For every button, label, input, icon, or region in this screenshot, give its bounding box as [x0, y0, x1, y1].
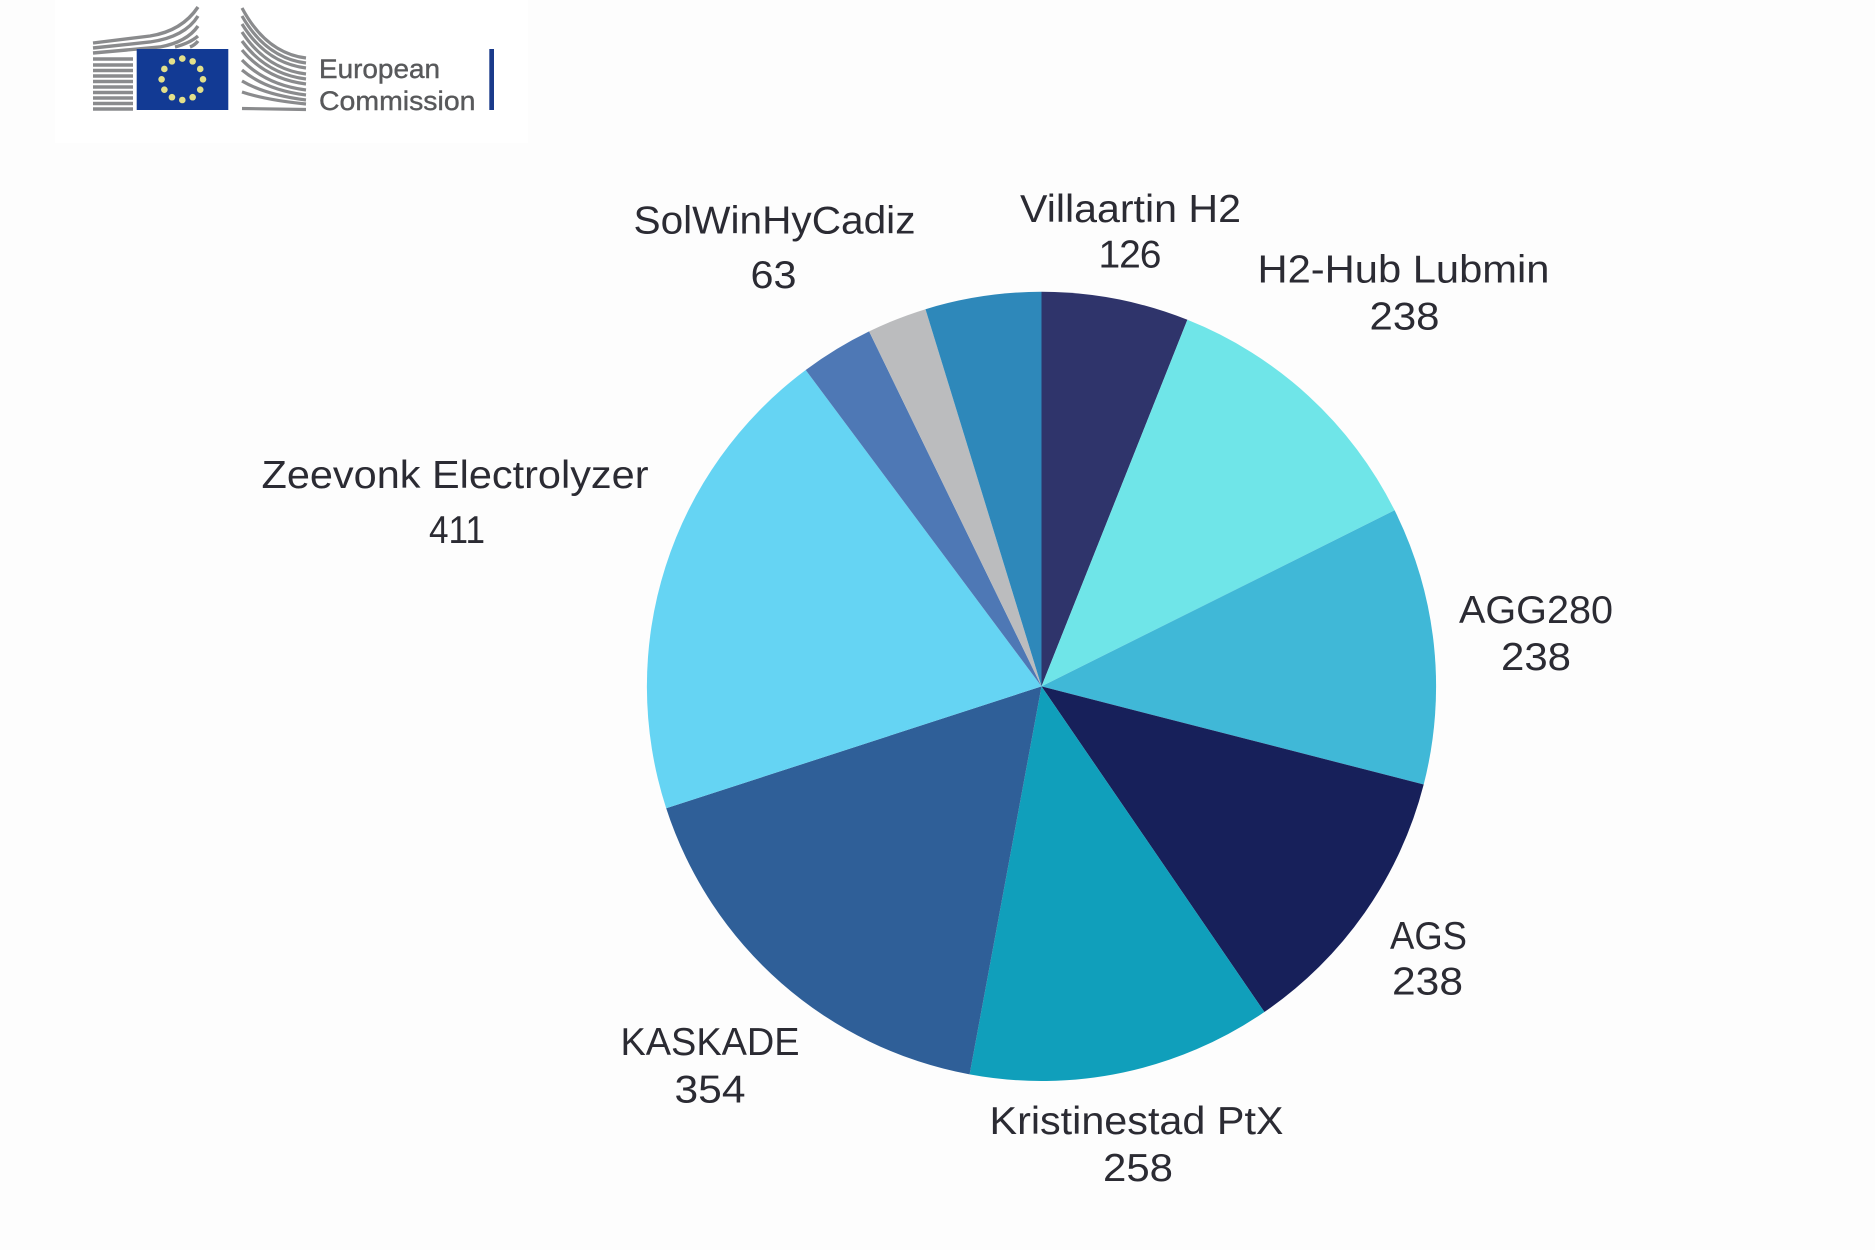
label: Kristinestad PtX 258: 258 — [1103, 1147, 1173, 1190]
logo: European Commission — [55, 0, 528, 143]
slice: unlabelled mid blue — [926, 292, 1042, 686]
slice: AGS — [1042, 686, 1424, 1012]
label: KASKADE 354: 354 — [674, 1068, 746, 1112]
label: H2-Hub Lubmin 238 — [1258, 248, 1550, 338]
slice: SolWinHyCadiz — [869, 309, 1042, 686]
text: Commission: Commission — [319, 86, 476, 116]
label: AGS 238: AGS — [1390, 915, 1467, 958]
label: Villaartin H2 126: 126 — [1098, 234, 1162, 276]
label: AGG280 238 — [1459, 589, 1613, 679]
label: Villaartin H2 126: Villaartin H2 — [1020, 188, 1241, 231]
pie chart — [647, 292, 1436, 1081]
slice: Kristinestad PtX — [970, 686, 1264, 1081]
icon: left building stripes — [93, 7, 198, 109]
label: AGG280 238: 238 — [1501, 636, 1571, 679]
label: SolWinHyCadiz 63: SolWinHyCadiz — [634, 200, 916, 242]
label: KASKADE 354 — [620, 1021, 800, 1112]
slice: Villaartin H2 — [1042, 292, 1187, 686]
logo divider bar — [489, 49, 494, 110]
label: SolWinHyCadiz 63 — [634, 200, 916, 297]
label: KASKADE 354: KASKADE — [620, 1021, 800, 1064]
slice: H2-Hub Lubmin — [1042, 320, 1395, 686]
label: H2-Hub Lubmin 238: H2-Hub Lubmin — [1258, 248, 1550, 292]
label: Villaartin H2 126 — [1020, 188, 1241, 276]
icon: EU flag — [137, 49, 228, 110]
label: Zeevonk Electrolyzer 411: Zeevonk Electrolyzer — [262, 454, 649, 497]
label: Kristinestad PtX 258 — [990, 1100, 1284, 1190]
label: SolWinHyCadiz 63: 63 — [750, 254, 796, 297]
label: AGS 238: 238 — [1392, 960, 1463, 1004]
text: European: European — [319, 54, 440, 84]
slice: Zeevonk Electrolyzer — [647, 370, 1042, 808]
label: Zeevonk Electrolyzer 411: 411 — [429, 509, 485, 552]
slice: unlabelled blue — [806, 331, 1042, 686]
label: AGG280 238: AGG280 — [1459, 589, 1613, 632]
label: H2-Hub Lubmin 238: 238 — [1370, 296, 1440, 338]
icon: right building stripes — [242, 8, 306, 110]
slice: KASKADE — [666, 686, 1042, 1074]
label: Kristinestad PtX 258: Kristinestad PtX — [990, 1100, 1284, 1143]
label: AGS 238 — [1390, 915, 1467, 1004]
label: Zeevonk Electrolyzer 411 — [262, 454, 649, 552]
slice: AGG280 — [1042, 510, 1436, 784]
